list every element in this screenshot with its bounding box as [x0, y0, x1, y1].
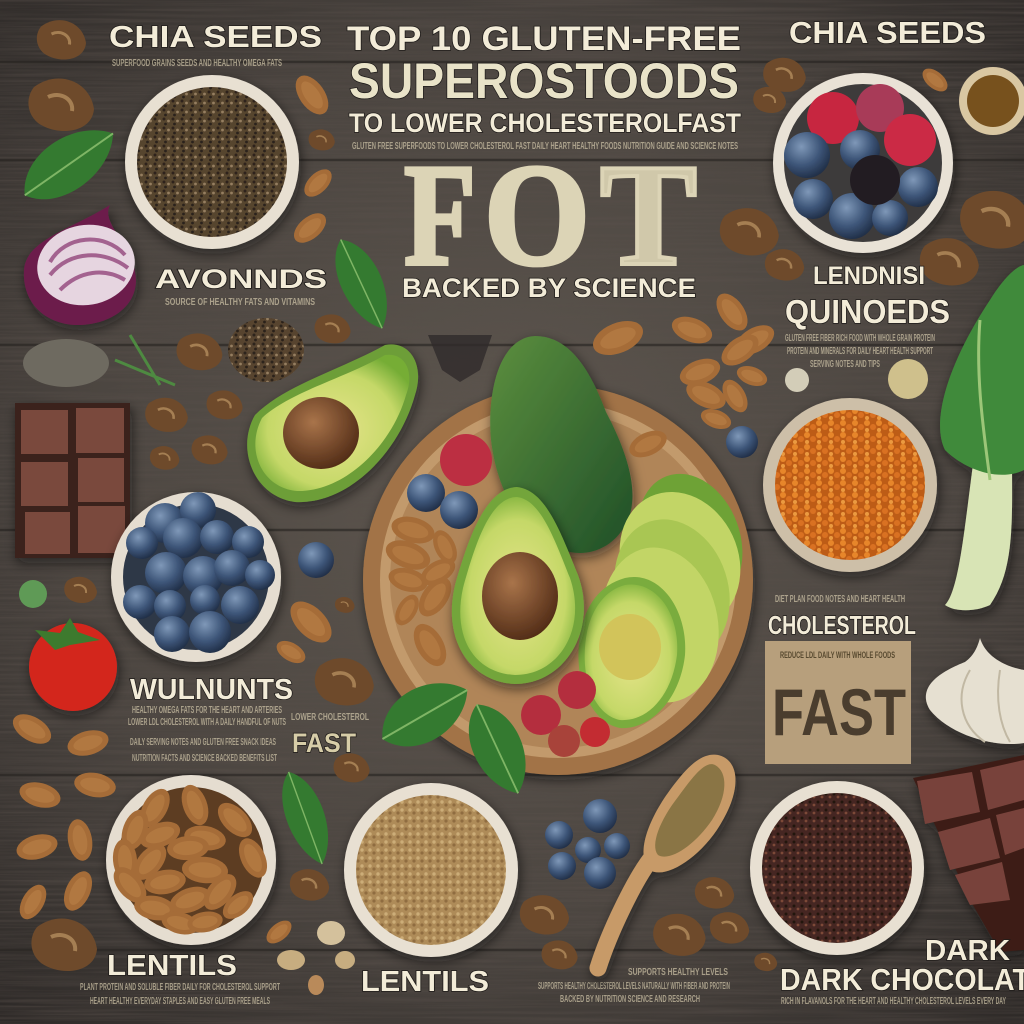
- icon: tomato: [29, 618, 117, 711]
- heading: lentils left: [80, 950, 280, 1007]
- nuts near spoon: [520, 877, 777, 971]
- heading: cholesterol fast: [765, 594, 916, 764]
- icon: wooden spoon with grains: [598, 755, 736, 968]
- bowl: grains: [344, 783, 518, 957]
- large word FOT: F: [404, 134, 476, 296]
- scattered nuts lower centre: [262, 869, 355, 995]
- heading: dark chocolate: DARK: [925, 935, 1010, 967]
- bowl: dark seeds: [750, 781, 924, 955]
- heading: lentils left: LENTILS: [107, 950, 237, 982]
- heading: lendnisi and quinoeds: [785, 262, 950, 370]
- top right nuts and small bowl: [720, 58, 1024, 285]
- blueberries lower centre: [545, 799, 630, 889]
- heading: lentils centre: SUPPORTS HEALTHY LEVELS: [628, 967, 728, 978]
- icon: garlic: [926, 638, 1024, 744]
- bowl: almonds: [106, 775, 276, 945]
- icon: red onion: [24, 205, 141, 325]
- heading: lentils centre: BACKED BY NUTRITION SCIENCE AND RESEARCH: [560, 994, 700, 1005]
- heading: lendnisi and quinoeds: LENDNISI: [813, 262, 925, 290]
- heading: dark chocolate: [780, 935, 1024, 1007]
- bowl: chia seeds top left: [125, 75, 299, 249]
- heading: wulnunts and fast: NUTRITION FACTS AND SCIENCE BACKED BENEFITS LIST: [132, 753, 277, 764]
- large word FOT: O: [484, 134, 590, 296]
- scattered nuts top left: [28, 20, 337, 248]
- heading: wulnunts and fast: HEALTHY OMEGA FATS FOR THE HEART AND ARTERIES: [132, 705, 282, 716]
- heading: chia seeds left: [109, 19, 322, 69]
- avocado slices: [578, 459, 762, 728]
- title: TO LOWER CHOLESTEROLFAST: [349, 108, 741, 138]
- heading: avonnds: SOURCE OF HEALTHY FATS AND VITAMINS: [165, 297, 315, 308]
- chocolate bar lower right: [913, 755, 1024, 952]
- whole avocado: [490, 336, 632, 553]
- avocado half centre: [452, 487, 584, 684]
- bowl: blueberries: [111, 492, 281, 662]
- title: SUPEROSTOODS: [349, 53, 739, 109]
- heading: wulnunts and fast: WULNUNTS: [130, 674, 293, 706]
- decorative caption line under title: GLUTEN FREE SUPERFOODS TO LOWER CHOLESTEROL FAST DAILY HEART HEALTHY FOODS NUTRITION GUIDE AND SCIENCE NOTES: [352, 141, 738, 152]
- icon: spinach leaf centre left: [323, 231, 401, 337]
- heading: lentils left: HEART HEALTHY EVERYDAY STAPLES AND EASY GLUTEN FREE MEALS: [90, 996, 270, 1007]
- text: SUPPORTS HEALTHY CHOLESTEROL LEVELS NATURALLY WITH FIBER AND PROTEIN: [538, 981, 730, 992]
- berries and almonds on plate: [382, 425, 671, 672]
- heading: wulnunts and fast: DAILY SERVING NOTES AND GLUTEN FREE SNACK IDEAS: [130, 737, 276, 748]
- subtitle: backed by science: BACKED BY SCIENCE: [402, 273, 696, 303]
- round wooden plate: [363, 385, 753, 775]
- heading: chia seeds right: CHIA SEEDS: [789, 15, 986, 50]
- heading: cholesterol fast: REDUCE LDL DAILY WITH WHOLE FOODS: [780, 650, 895, 660]
- chia seed pile and scattered nuts: [23, 314, 492, 470]
- large word FOT: T: [600, 134, 697, 296]
- chocolate bar left: [15, 403, 130, 558]
- title: TOP 10 GLUTEN-FREE: [347, 20, 741, 58]
- bowl: mixed berries: [773, 73, 953, 253]
- title: [347, 20, 741, 138]
- heading: lendnisi and quinoeds: SERVING NOTES AND TIPS: [810, 359, 880, 370]
- heading: cholesterol fast: DIET PLAN FOOD NOTES AND HEART HEALTH: [775, 594, 905, 605]
- heading: lentils centre: LENTILS: [361, 966, 489, 998]
- bowl: orange lentils: [763, 398, 937, 572]
- heading: cholesterol fast: FAST: [772, 675, 906, 749]
- heading: avonnds: [155, 264, 327, 308]
- avocado half upper left: [247, 344, 418, 502]
- heading: wulnunts and fast: LOWER CHOLESTEROL: [291, 712, 369, 723]
- spinach right: [940, 265, 1024, 610]
- berries and basil at plate bottom: [369, 666, 610, 803]
- icon: green leaf lower: [271, 765, 340, 870]
- heading: lentils left: PLANT PROTEIN AND SOLUBLE FIBER DAILY FOR CHOLESTEROL SUPPORT: [80, 982, 280, 993]
- small icons left: [19, 577, 97, 608]
- almonds left column: [8, 708, 118, 971]
- heading: lendnisi and quinoeds: QUINOEDS: [785, 293, 950, 330]
- loose blueberry and nuts beside bowl: [273, 542, 374, 782]
- heading: avonnds: AVONNDS: [155, 264, 327, 294]
- heading: lentils centre: [361, 966, 730, 1005]
- heading: wulnunts and fast: FAST: [292, 728, 356, 758]
- heading: wulnunts and fast: LOWER LDL CHOLESTEROL WITH A DAILY HANDFUL OF NUTS: [128, 717, 286, 728]
- large word FOT: [404, 134, 697, 296]
- almond cluster upper right: [588, 288, 928, 458]
- heading: chia seeds left: SUPERFOOD GRAINS SEEDS AND HEALTHY OMEGA FATS: [112, 58, 282, 69]
- heading: wulnunts and fast: [128, 674, 369, 764]
- heading: cholesterol fast: CHOLESTEROL: [768, 610, 916, 640]
- icon: basil leaf left: [10, 112, 127, 216]
- heading: chia seeds left: CHIA SEEDS: [109, 19, 322, 54]
